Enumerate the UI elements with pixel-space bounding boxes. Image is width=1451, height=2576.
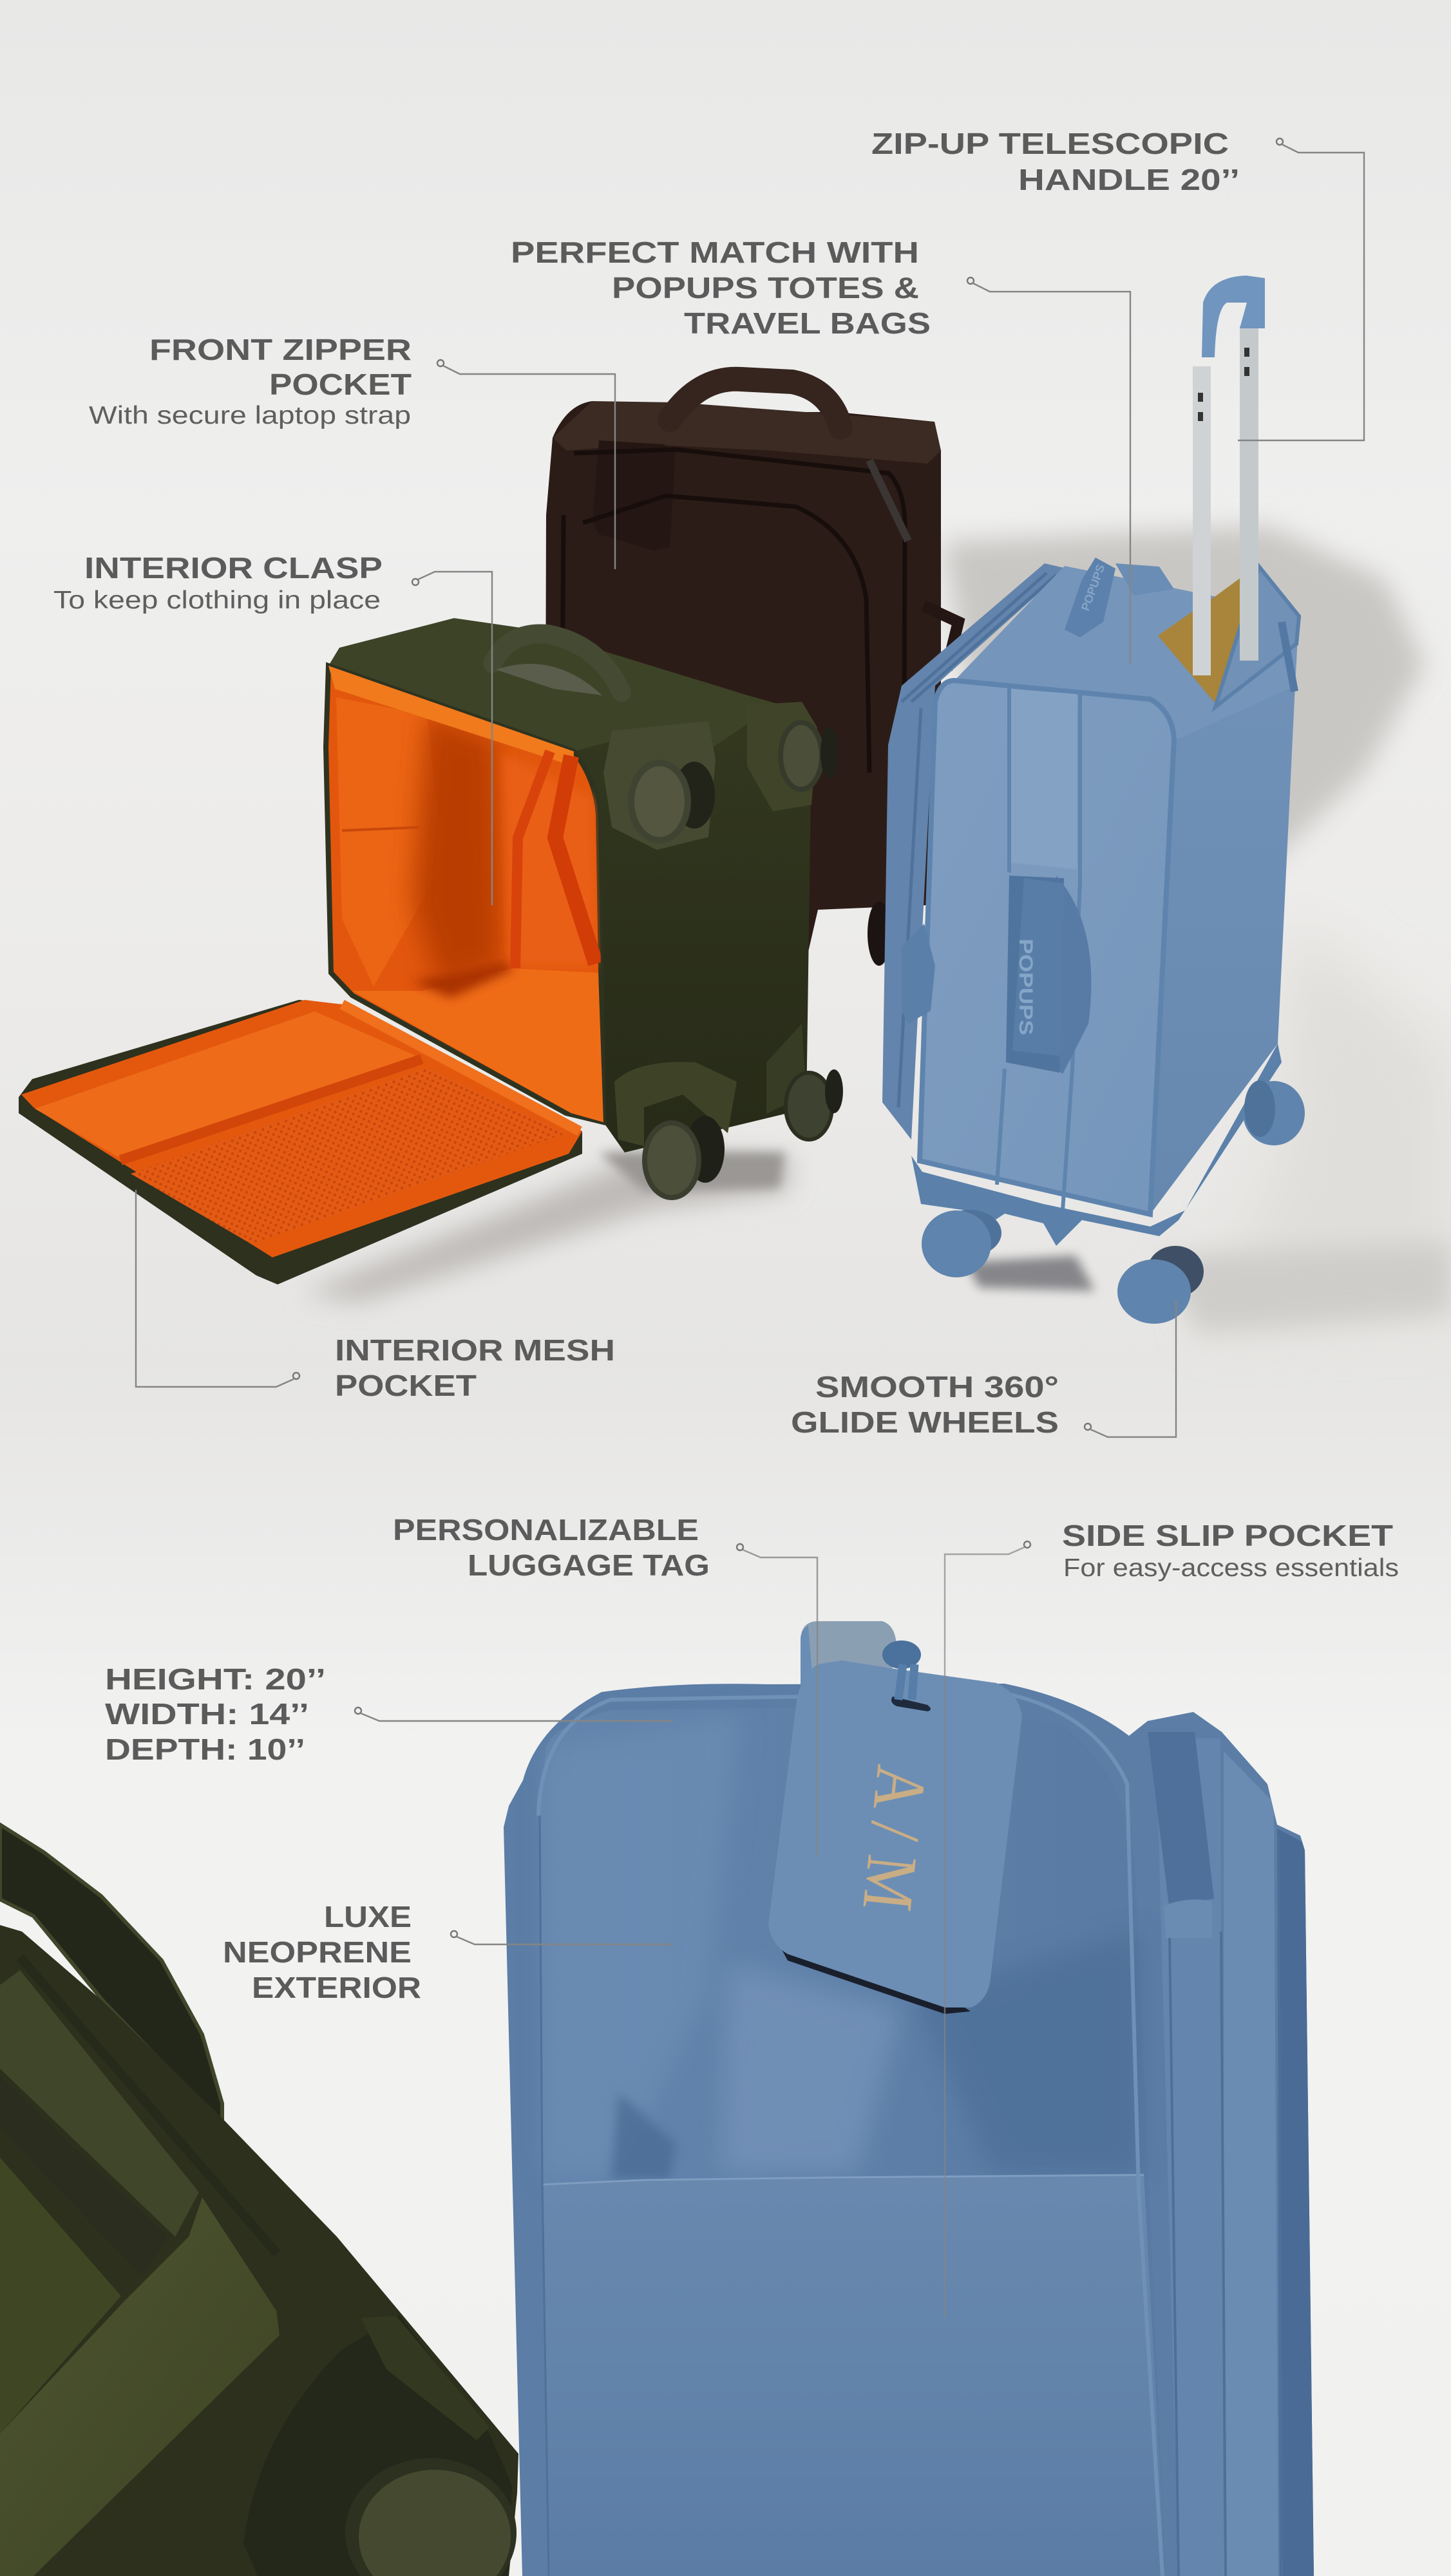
- description: With secure laptop strap: [89, 402, 411, 429]
- leader line: [437, 360, 615, 569]
- soft wall and floor shadows: [303, 526, 1451, 1333]
- outer zipper: [20, 1957, 277, 2253]
- carry handle: [801, 1621, 896, 1686]
- gold lining: [1159, 567, 1256, 705]
- width: WIDTH: 14’’: [105, 1697, 309, 1731]
- tag shadow: [768, 1924, 971, 2014]
- heading: LUXE: [324, 1900, 412, 1933]
- slip pocket: [542, 2175, 1166, 2576]
- wheel housing: [243, 2315, 512, 2576]
- silhouette: [504, 1684, 1314, 2576]
- leader line: [412, 572, 492, 905]
- flap zipper pull: [1282, 622, 1295, 691]
- front panel: [920, 681, 1174, 1214]
- lid shell: [19, 1000, 582, 1284]
- heading line 3: TRAVEL BAGS: [684, 306, 931, 340]
- upper pocket panel: [35, 1011, 422, 1158]
- leader line: [355, 1707, 673, 1721]
- callout: front zipper pocket: [89, 333, 615, 569]
- luggage tag: [768, 1660, 1022, 2007]
- big blue suitcase close-up: [504, 1621, 1314, 2576]
- side zipper pull: [902, 924, 935, 1024]
- bottom wheels: [786, 1073, 832, 1140]
- heading line 3: EXTERIOR: [252, 1971, 421, 2004]
- open lid: [19, 1000, 582, 1284]
- piping: [342, 1004, 580, 1131]
- side panel: [574, 709, 811, 1152]
- green suitcase close-up: [0, 1825, 518, 2576]
- callout: side slip pocket: [945, 1519, 1399, 2318]
- front zipper: [0, 2076, 168, 2276]
- top carry handle: [1065, 558, 1115, 637]
- top panel: [954, 566, 1299, 739]
- description: To keep clothing in place: [53, 587, 381, 614]
- side strip: [1156, 1738, 1224, 2576]
- description: For easy-access essentials: [1063, 1554, 1399, 1582]
- leader line: [737, 1544, 817, 1856]
- blue suitcase: [882, 276, 1305, 1324]
- heading: SIDE SLIP POCKET: [1062, 1519, 1393, 1552]
- leader line: [1085, 1300, 1176, 1437]
- zipper gusset: [882, 563, 1067, 1140]
- handle grip: [1202, 276, 1265, 357]
- carry handle: [0, 1825, 222, 2125]
- heading: PERFECT MATCH WITH: [511, 236, 919, 269]
- centre panel highlight: [1011, 689, 1077, 869]
- heading: ZIP-UP TELESCOPIC: [871, 127, 1229, 160]
- tag cord: [882, 1641, 921, 1700]
- side strap: [924, 606, 958, 670]
- heading: PERSONALIZABLE: [393, 1513, 699, 1547]
- telescopic poles: [1193, 366, 1211, 675]
- callout: personalizable tag: [393, 1513, 817, 1856]
- brown suitcase: [545, 379, 958, 966]
- right side panel: [1150, 686, 1295, 1214]
- heading line 2: HANDLE 20’’: [1018, 163, 1240, 196]
- heading: INTERIOR CLASP: [84, 551, 383, 585]
- top handle: [493, 634, 621, 692]
- bright panel: [0, 2197, 280, 2576]
- leader line: [451, 1931, 673, 1944]
- heading line 2: POCKET: [335, 1369, 477, 1402]
- heading line 2: NEOPRENE: [223, 1935, 412, 1969]
- callout: glide wheels: [791, 1300, 1176, 1439]
- embroidered monogram: A / M: [847, 1762, 942, 1915]
- main face: [540, 1706, 1166, 2576]
- centre seams: [997, 686, 1080, 1210]
- brand text on top handle: POPUPS: [1079, 563, 1107, 612]
- upper band: [0, 1970, 199, 2237]
- callout: luxe neoprene: [223, 1900, 673, 2004]
- callout: dimensions: [105, 1662, 673, 1766]
- side handle: [1006, 876, 1091, 1074]
- handle: [670, 379, 840, 428]
- callout: zip-up telescopic handle: [871, 127, 1364, 440]
- mesh pocket: [131, 1067, 566, 1244]
- zipper pull: [869, 460, 908, 541]
- zipper: [1148, 1732, 1214, 1906]
- lower panel: [0, 2158, 121, 2434]
- tag hole: [891, 1697, 931, 1711]
- heading line 2: GLIDE WHEELS: [791, 1406, 1059, 1439]
- bottom wheel housings: [614, 1062, 737, 1146]
- callout: perfect match: [511, 236, 1130, 663]
- zipper pull tab: [1168, 1899, 1205, 1906]
- outer pocket flap: [1215, 567, 1299, 707]
- leader line: [967, 277, 1130, 663]
- zippers: [562, 449, 905, 805]
- leader line: [136, 1190, 299, 1387]
- light facets: [656, 1740, 719, 2038]
- heading line 2: POPUPS TOTES &: [612, 271, 919, 305]
- callout: interior mesh pocket: [136, 1190, 615, 1402]
- leader line: [1238, 138, 1364, 440]
- top wheel housings: [603, 721, 716, 850]
- brand text on handle: POPUPS: [1015, 939, 1036, 1035]
- leader line: [945, 1541, 1030, 2318]
- top wheels: [674, 762, 715, 829]
- wheel: [345, 2458, 517, 2576]
- body: [545, 401, 941, 966]
- heading line 2: POCKET: [269, 368, 412, 401]
- green suitcase: [326, 618, 843, 1198]
- top panel: [328, 618, 805, 751]
- rear wheel: [868, 901, 891, 966]
- callout: interior clasp: [53, 551, 492, 905]
- base trim: [911, 1044, 1282, 1246]
- wheels: [922, 1080, 1305, 1324]
- heading: SMOOTH 360°: [815, 1370, 1059, 1404]
- depth: DEPTH: 10’’: [105, 1733, 305, 1766]
- piping: [538, 1693, 1162, 2576]
- heading: INTERIOR MESH: [335, 1333, 615, 1367]
- heading line 2: LUGGAGE TAG: [468, 1548, 710, 1582]
- orange interior: [326, 666, 603, 1122]
- lid lining: [21, 1000, 582, 1257]
- body: [0, 1925, 518, 2576]
- heading: FRONT ZIPPER: [149, 333, 412, 366]
- top panel: [553, 401, 941, 464]
- zipper: [120, 1059, 422, 1160]
- height: HEIGHT: 20’’: [105, 1662, 326, 1696]
- luggage tag: [593, 440, 676, 550]
